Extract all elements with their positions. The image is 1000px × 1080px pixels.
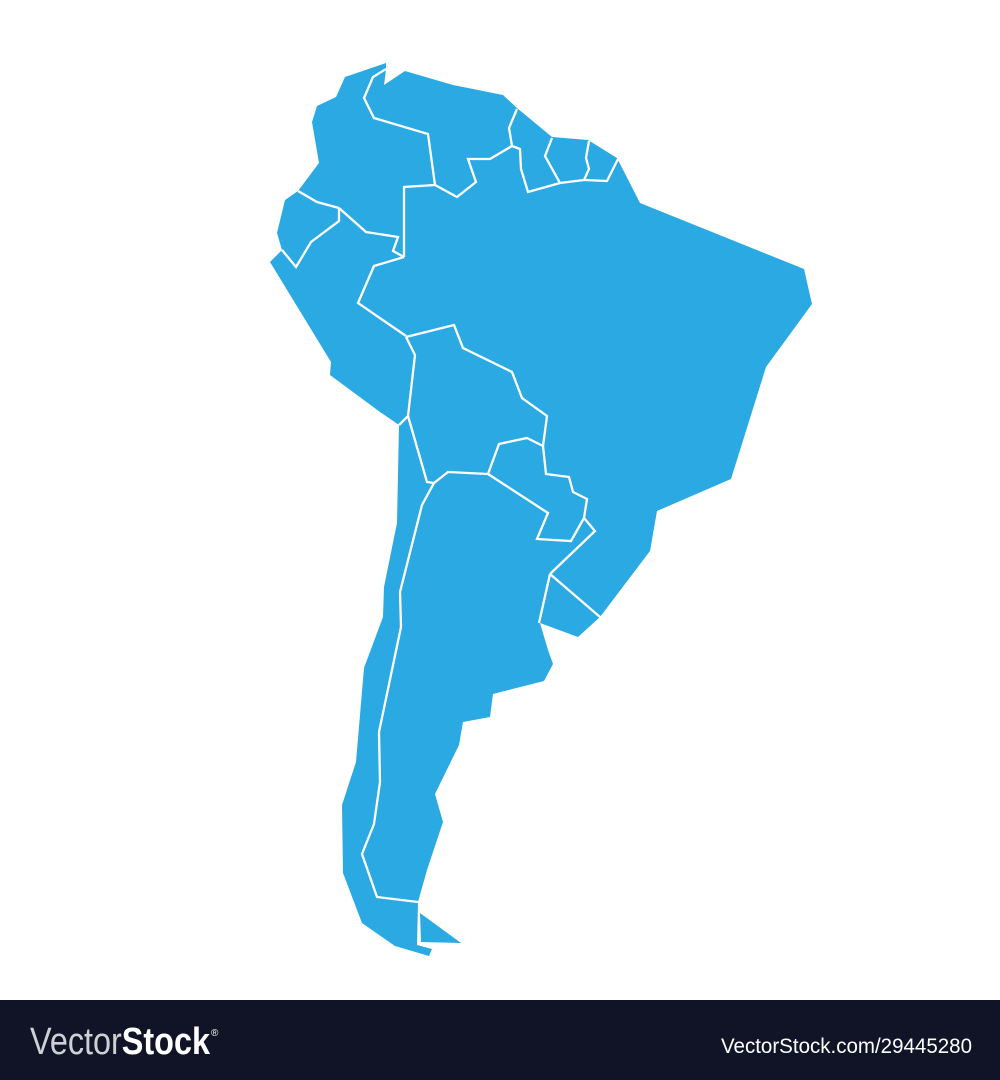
border: Argentina and Brazil	[550, 518, 595, 574]
landmass: Tierra del Fuego	[420, 913, 461, 943]
border: Paraguay and Brazil	[543, 446, 587, 518]
map: South America	[270, 63, 812, 956]
border: Suriname and French Guiana	[584, 141, 589, 180]
border: Paraguay and Argentina	[488, 474, 584, 541]
border: Peru and Bolivia	[406, 337, 415, 416]
border: Suriname and Brazil	[560, 180, 584, 183]
border: French Guiana and Brazil	[584, 159, 618, 181]
country borders	[282, 69, 618, 902]
border: Chile and Argentina	[362, 483, 434, 902]
border: Colombia and Ecuador	[298, 191, 339, 208]
logo: VectorStock: VectorStock	[30, 1021, 211, 1063]
border: Bolivia and Argentina	[434, 472, 488, 483]
border: Bolivia and Chile	[408, 416, 434, 483]
logo: registered mark: ®	[211, 1028, 219, 1039]
image id: VectorStock.com/29445280	[721, 1035, 972, 1058]
border: Uruguay and Argentina	[539, 574, 550, 623]
footer bar	[0, 1000, 1000, 1080]
border: Guyana and Suriname	[545, 138, 560, 183]
border: Ecuador and Peru	[282, 208, 339, 267]
border: Venezuela and Brazil	[435, 146, 512, 197]
border: Uruguay and Brazil	[550, 574, 600, 617]
border: Guyana and Brazil	[512, 146, 560, 192]
border: Colombia and Venezuela	[364, 69, 435, 185]
border: Colombia and Brazil	[404, 185, 435, 257]
border: Bolivia and Paraguay	[488, 438, 543, 474]
border: Peru and Brazil	[358, 257, 406, 336]
landmass: continent silhouette	[270, 63, 812, 956]
border: Colombia and Peru	[339, 208, 404, 257]
border: Venezuela and Guyana	[509, 109, 517, 146]
border: Peru and Chile	[399, 416, 408, 425]
border: Bolivia and Brazil	[406, 325, 547, 446]
